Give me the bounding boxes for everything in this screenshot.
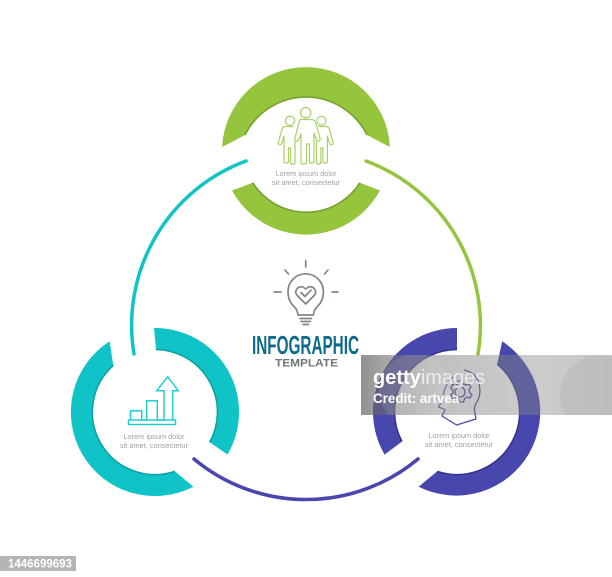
image id tag: 1446699693 bbox=[8, 558, 72, 570]
panel: teal ring bbox=[71, 328, 239, 496]
panel: purple ring: sit amet, consectetur bbox=[425, 440, 494, 449]
green ring top arc bbox=[222, 67, 390, 147]
teal ring text: Lorem ipsum dolor bbox=[123, 432, 185, 441]
teal ring left arc bbox=[71, 341, 193, 496]
title: INFOGRAPHIC bbox=[252, 330, 359, 360]
purple ring text: Lorem ipsum dolor bbox=[428, 431, 490, 440]
subtitle: TEMPLATE bbox=[275, 358, 338, 370]
arrow: green connector arc bbox=[366, 161, 480, 354]
panel: teal ring: sit amet, consectetur bbox=[120, 441, 189, 450]
icon: head with gear bbox=[438, 370, 480, 425]
arrow: purple connector arc bbox=[194, 459, 418, 500]
watermark band bbox=[361, 355, 612, 415]
icon: rising bar chart with arrow bbox=[128, 377, 178, 424]
green ring bottom arc bbox=[232, 183, 380, 235]
watermark credit: Credit: artvea bbox=[373, 391, 460, 406]
image id tag bbox=[0, 556, 76, 571]
panel: green ring bbox=[222, 67, 390, 235]
panel: purple ring bbox=[373, 328, 540, 496]
panel: green ring: sit amet, consectetur bbox=[272, 178, 341, 187]
teal ring right arc bbox=[154, 328, 239, 454]
purple ring left arc bbox=[373, 328, 457, 455]
purple ring right arc bbox=[419, 341, 540, 496]
watermark logo: gettyimages bbox=[373, 367, 485, 389]
icon: light bulb with check bbox=[274, 260, 338, 324]
green ring text: Lorem ipsum dolor bbox=[275, 169, 337, 178]
icon: three people bbox=[278, 108, 333, 164]
arrow: teal connector arc bbox=[132, 161, 246, 354]
